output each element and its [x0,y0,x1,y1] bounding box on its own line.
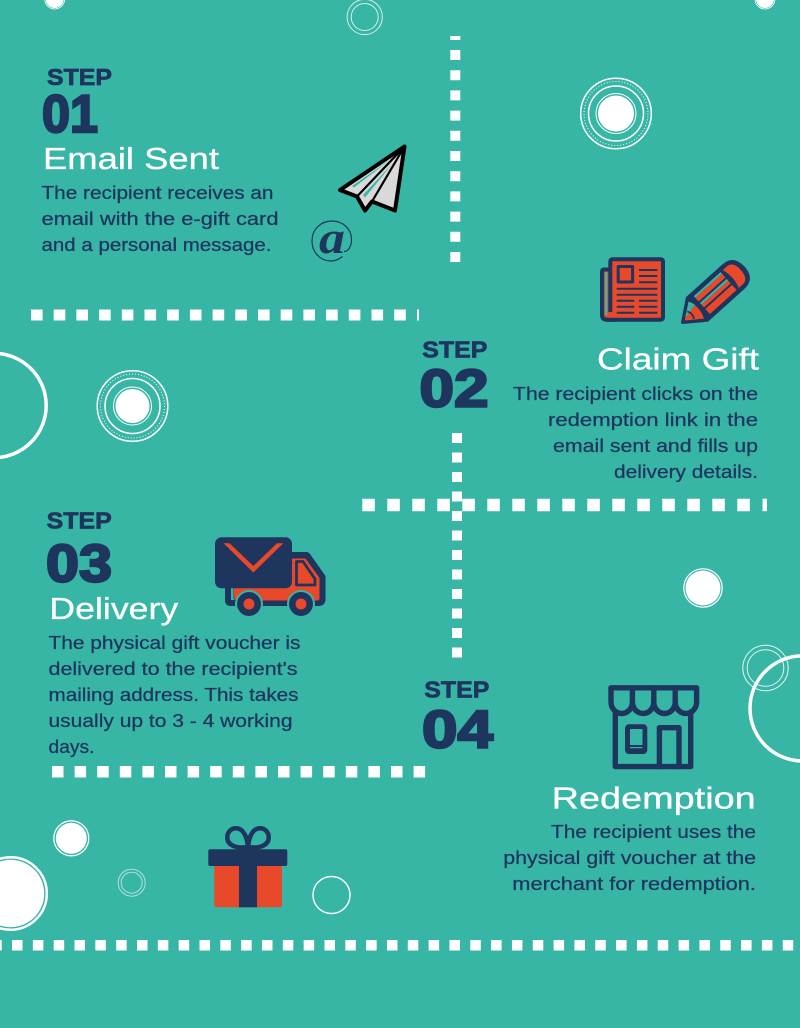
text: step 02 description: email sent and fills up [553,435,758,456]
icon: paper plane [340,146,404,210]
icon: delivery truck with envelope [215,537,326,618]
icon: at sign [312,212,352,263]
panel: step 04 [422,676,756,894]
text: step 01 description: The recipient receives an [42,182,274,203]
text: step 04 description: The recipient uses the [551,821,756,842]
step number 04: 04 [422,700,494,759]
step number 02: 02 [420,360,488,419]
panel: step 02 [420,336,759,482]
text: step 03 description: usually up to 3 - 4 working [48,710,292,731]
heading: Email Sent: Email Sent [43,141,219,176]
step label 03: STEP [47,507,112,533]
icon: at sign: a [319,212,345,263]
heading: Delivery: Delivery [49,591,179,626]
text: step 04 description [503,821,756,894]
text: step 03 description: days. [48,736,94,757]
decorative circle: right middle [684,569,722,607]
icon: newspaper [602,259,663,320]
text: step 02 description [513,383,758,482]
decorative target: upper right [581,78,651,149]
text: step 01 description: email with the e-gift card [42,208,278,229]
text: step 04 description: physical gift voucher at the [503,847,756,868]
text: step 02 description: redemption link in the [548,409,758,430]
text: step 03 description: mailing address. This takes [48,684,298,705]
text: step 02 description: The recipient clicks on the [513,383,758,404]
heading: Claim Gift: Claim Gift [597,341,759,376]
step number 01: 01 [42,85,98,144]
panel: step 01 [42,64,278,255]
decorative circle: top left [45,0,65,9]
text: step 03 description: The physical gift voucher is [48,632,300,653]
decorative ring: bottom centre [313,876,350,914]
heading: Redemption: Redemption [552,780,756,815]
icon: gift box [208,828,287,907]
decorative circle: bottom left small [54,821,89,856]
decorative ring: bottom left [118,869,145,896]
decorative circle: bottom left large [0,857,47,930]
text: step 02 description: delivery details. [614,461,758,482]
decorative circle: top right [755,0,775,9]
decorative ring: top centre [347,0,382,35]
icon: pencil [672,256,753,334]
panel: step 03 [46,507,300,757]
text: step 01 description: and a personal message. [42,234,272,255]
text: step 03 description [48,632,300,757]
step label 02: STEP [422,336,487,362]
decorative target: left [97,371,168,441]
text: step 04 description: merchant for redemption. [512,873,756,894]
step label 04: STEP [424,676,489,702]
text: step 01 description [42,182,278,255]
step label 01: STEP [47,64,112,90]
step number 03: 03 [46,535,112,594]
decorative ring: right [743,645,788,691]
text: step 03 description: delivered to the recipient's [48,658,298,679]
decorative arc: left [0,353,46,458]
decorative arc: right [750,656,800,761]
icon: storefront [611,688,697,767]
